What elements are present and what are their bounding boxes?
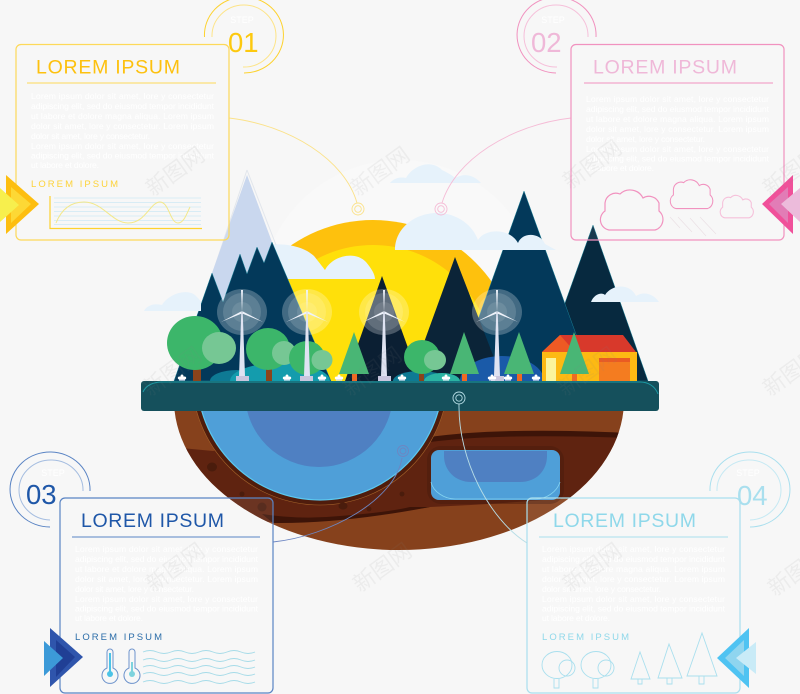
panel 1 body text: dolor sit amet, lore y consectetur. — [31, 131, 150, 141]
watermarks: 新图网 — [348, 538, 416, 597]
panel 3 body text: adipiscing elit, sed do eiusmod tempor incididunt — [75, 554, 259, 564]
panel 2 body text: Lorem ipsum dolor sit amet, lore y consectetur — [586, 144, 769, 154]
connector 1 — [229, 118, 364, 215]
mountain: tall right — [456, 191, 593, 381]
cloud: large centre — [395, 213, 556, 250]
icon: clouds outline — [600, 180, 753, 236]
watermarks: 新图网 — [138, 342, 206, 401]
panel 4 body text: adipiscing elit, sed do eiusmod tempor incididunt — [542, 604, 726, 614]
step badge 01: STEP — [230, 15, 254, 25]
panel 4 heading: LOREM IPSUM — [553, 510, 696, 532]
watermarks: 新图网 — [346, 142, 414, 201]
cloud: small right — [591, 286, 659, 302]
panel 2 body text: ut labore et dolore magna aliqua. Lorem ipsum — [586, 114, 769, 124]
arrow: cyan — [717, 628, 756, 688]
step badge 03 — [10, 452, 90, 527]
watermarks: 新图网 — [338, 342, 406, 401]
watermarks: 新图网 — [558, 538, 626, 597]
panel 2 body text: dolor sit amet, lore y consectetur. Lorem ipsum — [586, 124, 769, 134]
cloud behind first mountain — [262, 244, 375, 279]
flowers — [178, 374, 540, 381]
panel 3 body text: Lorem ipsum dolor sit amet, lore y consectetur — [75, 544, 258, 554]
connector 4 — [453, 392, 527, 543]
wind turbine 4 — [472, 289, 522, 381]
underground lake — [201, 411, 439, 501]
panel 3 body text: dolor sit amet, lore y consectetur. — [75, 584, 194, 594]
panel 1 body text: adipiscing elit, sed do eiusmod tempor incididunt — [31, 101, 215, 111]
panel 3 body text: adipiscing elit, sed do eiusmod tempor incididunt — [75, 604, 259, 614]
mountain: far right — [540, 225, 648, 381]
step badge 04: STEP — [736, 468, 760, 478]
panel 4 body text — [542, 544, 726, 623]
watermarks: 新图网 — [141, 142, 209, 201]
panel 1 subheading: LOREM IPSUM — [31, 179, 118, 190]
mountain: snowy peak — [174, 170, 331, 381]
panel 1 body text: adipiscing elit, sed do eiusmod tempor incididunt — [31, 150, 215, 160]
pine trees — [339, 332, 534, 381]
mountain: mid — [410, 257, 503, 381]
panel 2 body text: adipiscing elit, sed do eiusmod tempor incididunt — [586, 104, 770, 114]
panel 4 body text: dolor sit amet, lore y consectetur. Lorem ipsum — [542, 574, 725, 584]
panel 1 — [16, 44, 229, 240]
tree 3 — [289, 341, 332, 375]
watermarks: 新图网 — [558, 135, 626, 194]
icon: thermometers — [102, 649, 140, 683]
panel 4 — [527, 498, 740, 693]
step badge 04 — [710, 452, 790, 527]
hills — [210, 356, 544, 406]
mountain: centre — [345, 276, 420, 381]
panel 4 subheading: LOREM IPSUM — [542, 632, 629, 643]
waves — [143, 650, 255, 684]
panel 3 body text: dolor sit amet, lore y consectetur. Lorem ipsum — [75, 574, 258, 584]
step badge 02: STEP — [541, 15, 565, 25]
step badge 03: 03 — [26, 479, 57, 510]
step badge 02 — [517, 0, 596, 73]
panel 3 subheading: LOREM IPSUM — [75, 632, 162, 643]
watermarks: 新图网 — [141, 538, 209, 597]
panel 3 body text — [75, 544, 259, 623]
panel 2 body text: dolor sit amet, lore y consectetur. — [586, 134, 705, 144]
step badge 04: 04 — [737, 480, 768, 511]
tree 4 — [404, 340, 446, 381]
illustration: floating island scene — [141, 164, 659, 550]
icon: tree outlines — [542, 633, 717, 688]
arrow: blue — [44, 628, 83, 687]
underground tank — [427, 446, 564, 504]
panel 4 body text: dolor sit amet, lore y consectetur. — [542, 584, 661, 594]
panel 3 — [60, 498, 273, 693]
panel 4 body text: ut labore et dolore. — [542, 613, 610, 623]
panel 4 body text: adipiscing elit, sed do eiusmod tempor incididunt — [542, 554, 726, 564]
panel 2 body text: ut labore et dolore. — [586, 163, 654, 173]
house — [542, 332, 637, 381]
panel 3 heading: LOREM IPSUM — [81, 510, 224, 532]
cloud: top — [390, 164, 481, 183]
panel 2 body text: adipiscing elit, sed do eiusmod tempor incididunt — [586, 154, 770, 164]
watermarks — [138, 135, 800, 601]
wind turbine 1 — [217, 289, 267, 381]
panel 2 heading: LOREM IPSUM — [593, 56, 737, 78]
platform — [141, 381, 659, 411]
panel 2 body text — [586, 94, 770, 173]
step badge 01: 01 — [228, 27, 259, 58]
tree 2 — [246, 328, 296, 381]
sun — [228, 220, 518, 510]
panel 1 body text: Lorem ipsum dolor sit amet, lore y consectetur — [31, 91, 214, 101]
panel 2 body text: Lorem ipsum dolor sit amet, lore y consectetur — [586, 94, 769, 104]
panel 4 body text: Lorem ipsum dolor sit amet, lore y consectetur — [542, 594, 725, 604]
panel 3 body text: Lorem ipsum dolor sit amet, lore y consectetur — [75, 594, 258, 604]
panel 4 body text: ut labore et dolore magna aliqua. Lorem ipsum — [542, 564, 725, 574]
soil — [174, 411, 624, 550]
panel 3 body text: ut labore et dolore. — [75, 613, 143, 623]
tree 1 — [167, 316, 236, 381]
panel 1 body text: dolor sit amet, lore y consectetur. Lorem ipsum — [31, 121, 214, 131]
cloud: small left — [144, 292, 201, 311]
panel 1 body text: Lorem ipsum dolor sit amet, lore y consectetur — [31, 141, 214, 151]
panel 1 body text: ut labore et dolore. — [31, 160, 99, 170]
panel 3 body text: ut labore et dolore magna aliqua. Lorem ipsum — [75, 564, 258, 574]
connector 2 — [435, 118, 571, 215]
step badge 01 — [204, 0, 283, 73]
step badge 03: STEP — [41, 468, 65, 478]
panel 2 — [571, 44, 784, 240]
line chart — [50, 196, 202, 228]
wind turbine 3 — [359, 289, 409, 381]
panel 1 heading: LOREM IPSUM — [36, 56, 180, 78]
panel 1 body text — [31, 91, 215, 170]
watermarks: 新图网 — [553, 342, 621, 401]
panel 4 body text: Lorem ipsum dolor sit amet, lore y consectetur — [542, 544, 725, 554]
panel 1 body text: ut labore et dolore magna aliqua. Lorem ipsum — [31, 111, 214, 121]
step badge 02: 02 — [531, 27, 562, 58]
wind turbine 2 — [282, 289, 332, 381]
arrow: pink — [762, 175, 800, 234]
connector 3 — [273, 446, 408, 542]
arrow: yellow — [0, 175, 39, 234]
